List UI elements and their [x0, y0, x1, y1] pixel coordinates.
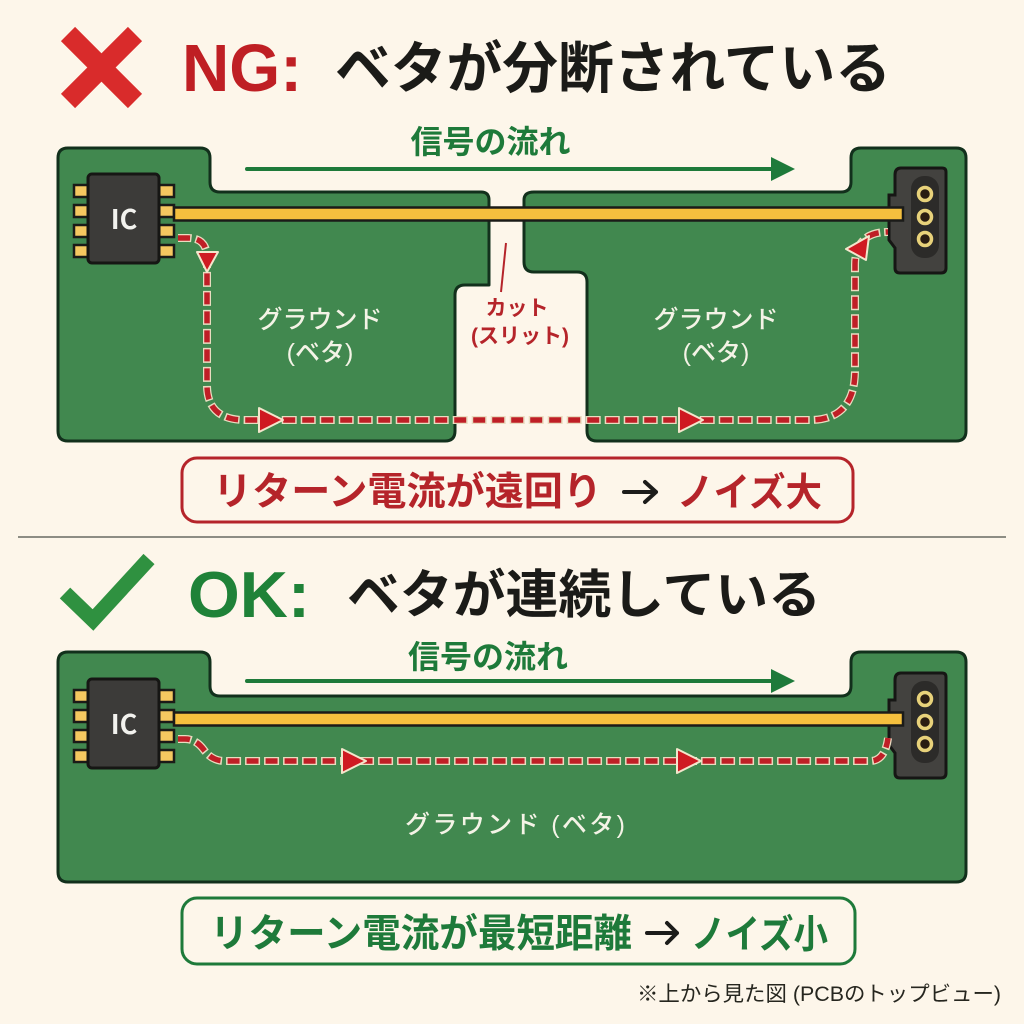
signal arrow	[247, 157, 795, 181]
slit callout: (スリット)	[471, 325, 569, 348]
ground labels left: グラウンド	[257, 306, 383, 334]
NG heading: NG:	[182, 31, 302, 106]
ground labels right: グラウンド	[653, 306, 779, 334]
ground labels left: (ベタ)	[287, 339, 353, 367]
signal arrow	[247, 669, 795, 693]
return current path	[178, 232, 888, 432]
connector	[889, 673, 946, 778]
OK heading: OK:	[188, 558, 310, 631]
NG result box: リターン電流が遠回り	[213, 471, 602, 514]
return current path	[178, 738, 888, 773]
OK result box: リターン電流が最短距離	[210, 913, 632, 956]
ground plane	[58, 652, 966, 882]
ground labels right	[653, 306, 779, 367]
IC chip: IC	[111, 198, 137, 237]
NG result box: ノイズ大	[677, 472, 822, 515]
arrow	[624, 482, 656, 502]
signal label: 信号の流れ	[408, 639, 568, 675]
OK heading: ベタが連続している	[347, 567, 821, 625]
panel: NG board	[58, 124, 966, 441]
slit callout	[471, 243, 569, 348]
connector	[889, 168, 946, 273]
OK result box: ノイズ小	[691, 914, 828, 957]
icon: green check	[65, 559, 149, 620]
arrow	[647, 923, 677, 943]
panel: OK board	[58, 639, 966, 882]
IC chip	[74, 679, 174, 768]
divider	[18, 536, 1006, 538]
icon: red cross	[68, 34, 135, 101]
signal trace	[174, 208, 903, 220]
ground label: グラウンド (ベタ)	[405, 811, 625, 839]
IC chip	[74, 174, 174, 263]
IC chip: IC	[111, 703, 137, 742]
NG heading	[182, 31, 891, 106]
OK result box	[182, 898, 855, 964]
signal label: 信号の流れ	[410, 124, 571, 160]
ground labels left	[257, 306, 383, 367]
ground labels right: (ベタ)	[683, 339, 749, 367]
footnote: ※上から見た図 (PCBのトップビュー)	[637, 983, 1001, 1006]
ground plane right	[524, 148, 966, 441]
NG result box	[182, 458, 853, 522]
slit callout: カット	[486, 297, 548, 320]
OK heading	[188, 558, 821, 631]
NG heading: ベタが分断されている	[335, 37, 891, 100]
ground plane left	[58, 148, 489, 441]
signal trace	[174, 712, 903, 726]
